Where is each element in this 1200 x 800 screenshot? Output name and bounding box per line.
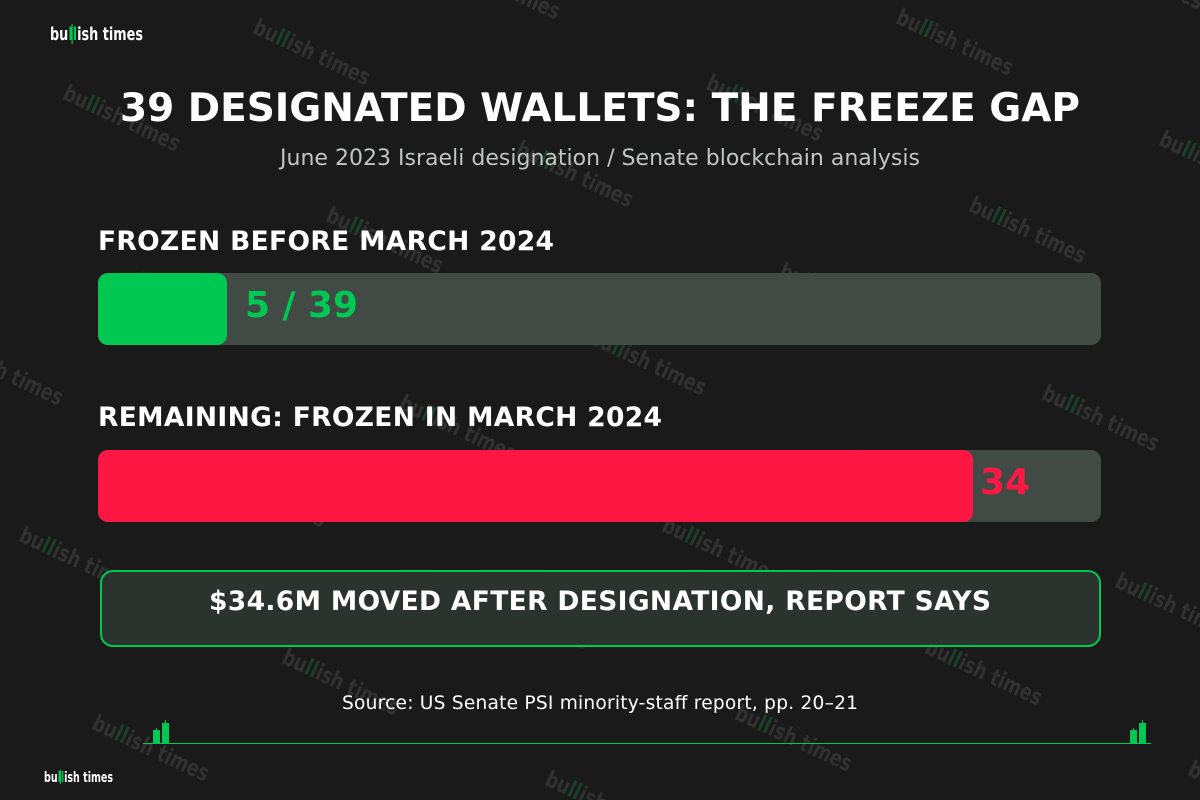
callout: $34.6M MOVED AFTER DESIGNATION, REPORT SAYS [209,586,991,617]
panel: frozen before March 2024 [98,226,1101,345]
watermark pattern: bullish times [1038,380,1163,457]
watermark pattern: bullish times [512,136,637,213]
heading: frozen before March 2024: FROZEN BEFORE MARCH 2024 [98,226,554,257]
watermark pattern: bullish times [585,324,710,401]
logo: bottom left: bullish times [44,770,113,786]
watermark pattern: bullish times [395,390,520,467]
logo: top left: bullish times [50,24,143,45]
baseline with candlesticks [143,720,1151,744]
watermark pattern: bullish times [15,522,140,599]
bar fill: 5 of 39 [98,273,227,345]
watermark pattern: bullish times [278,644,403,721]
watermark pattern: bullish times [205,456,330,533]
watermark pattern: bullish times [731,700,856,777]
bar track [98,450,1101,522]
panel: remaining frozen in March 2024 [98,402,1101,522]
heading: remaining: REMAINING: FROZEN IN MARCH 2024 [98,402,662,433]
watermark pattern: bullish times [88,710,213,787]
watermark pattern: bullish times [322,202,447,279]
watermark pattern: bullish times [468,578,593,655]
watermark pattern: bullish times [658,512,783,589]
watermark pattern: bullish times [892,4,1017,81]
watermark pattern: bullish times [249,14,374,91]
watermark pattern: bullish times [132,268,257,345]
value: 34: 34 [980,462,1030,503]
watermark pattern: bullish times [702,70,827,147]
subtitle: June 2023 Israeli designation / Senate blockchain analysis [278,146,920,171]
watermark pattern: bullish times [965,192,1090,269]
value: 5 / 39: 5 / 39 [245,285,358,326]
source note: Source: US Senate PSI minority-staff report, pp. 20–21 [342,693,858,714]
title: 39 DESIGNATED WALLETS: THE FREEZE GAP [120,86,1080,131]
watermark pattern: bullish times [59,80,184,157]
bar track [98,273,1101,345]
watermark pattern: bullish times [921,634,1046,711]
watermark pattern: bullish times [848,446,973,523]
watermark pattern: bullish times [775,258,900,335]
callout [101,571,1100,646]
bar fill: 34 of 39 [98,450,973,522]
